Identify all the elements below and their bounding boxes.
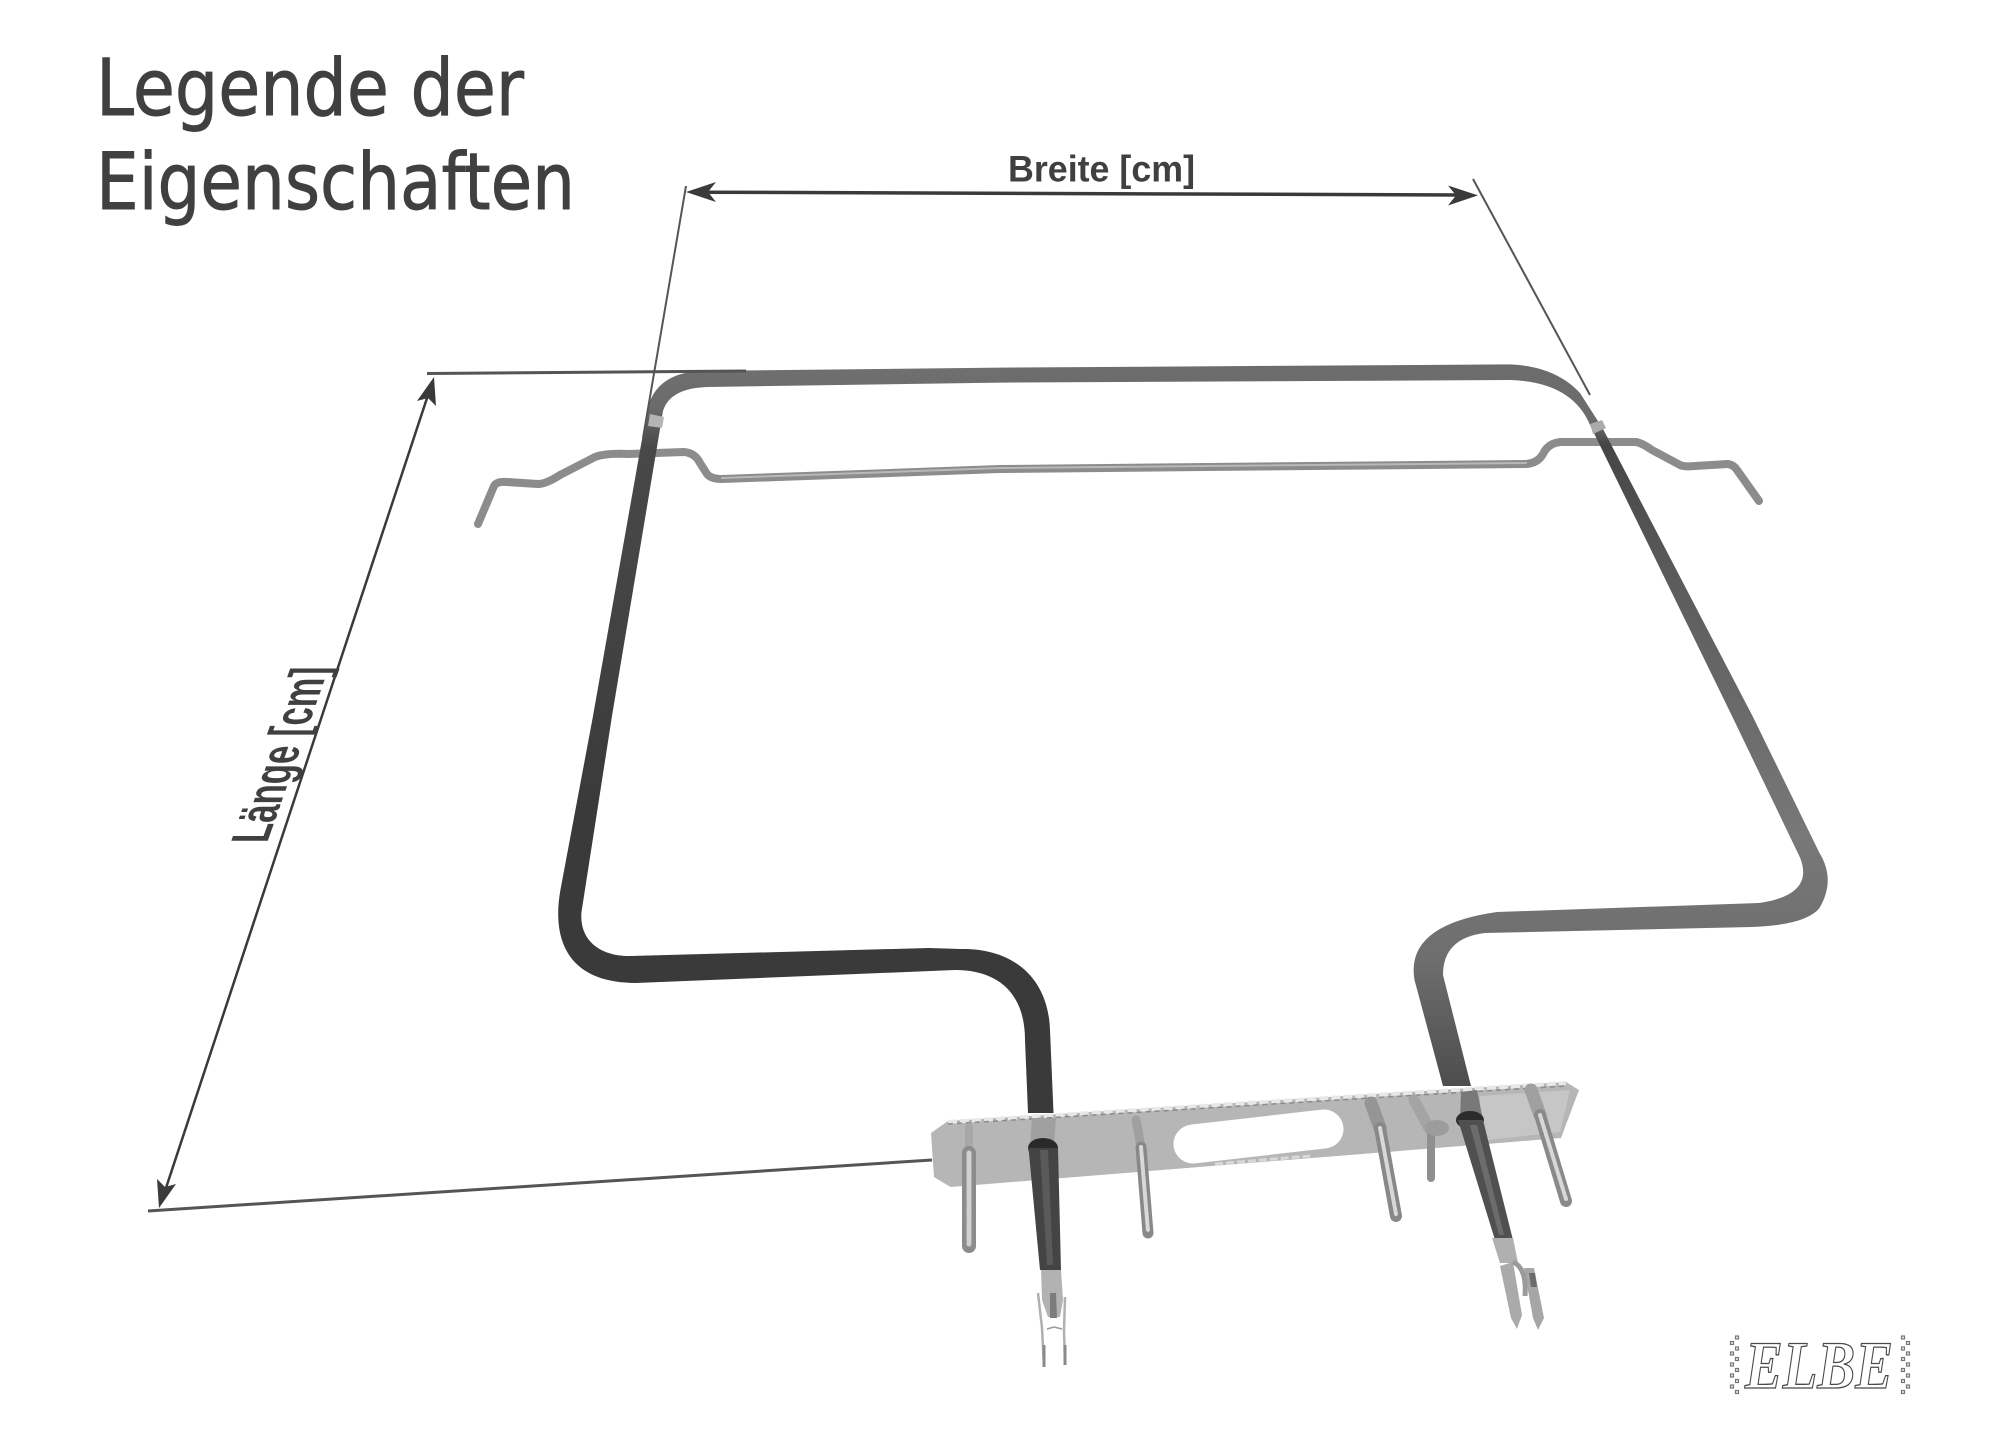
logo: ELBE: ELBE: [1744, 1327, 1893, 1403]
tube legs and sleeves below the plate: [1028, 1090, 1518, 1317]
heating tube: right half: [1000, 364, 1828, 1086]
label: Breite: Breite [cm]: [1008, 148, 1195, 190]
wire clips on the tube: [648, 414, 1606, 434]
extension line: right width limit: [1473, 179, 1590, 395]
pins on the plate: [969, 1090, 1566, 1246]
label: Länge: Länge [cm]: [220, 667, 341, 843]
extension line: top length limit: [427, 371, 746, 374]
arrow: length dimension: [157, 377, 436, 1208]
heating tube: left half: [558, 368, 1054, 1113]
extension line: bottom length limit: [148, 1160, 932, 1211]
oval slot in the plate: [1193, 1129, 1324, 1164]
extension line: left width limit: [643, 186, 686, 438]
mounting plate: [931, 1082, 1579, 1187]
locating wire of the heating element: [478, 442, 1759, 524]
title: Legende der: [96, 44, 525, 134]
title: [96, 44, 575, 228]
arrow: width dimension: [686, 182, 1478, 206]
title: Eigenschaften: [96, 138, 575, 228]
electrical terminals: [1038, 1262, 1544, 1367]
